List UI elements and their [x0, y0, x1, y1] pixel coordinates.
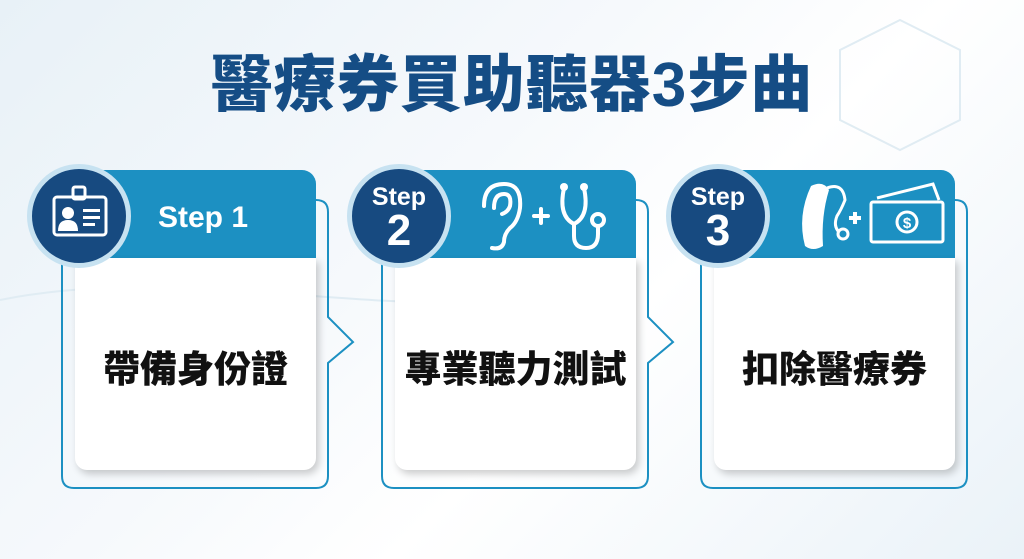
icon: ID card: [27, 164, 131, 268]
panel: step 1: [27, 164, 322, 478]
badge: step 2: Step: [372, 183, 426, 211]
icon: hearing aid plus money: $: [903, 215, 912, 232]
header bar step 1: Step 1: [158, 201, 248, 234]
badge: step 3: [666, 164, 770, 268]
body step 3: 扣除醫療券: [742, 349, 927, 390]
body step 2: 專業聽力測試: [404, 349, 626, 390]
badge: step 3: Step: [691, 183, 745, 211]
panel: step 3: [666, 164, 962, 478]
panel: step 2: [347, 164, 642, 478]
header bar step 3: [711, 170, 955, 258]
body step 3: [714, 258, 955, 470]
header bar step 1: [72, 170, 316, 258]
icon: hearing aid plus money: [802, 182, 944, 249]
body step 1: [75, 258, 316, 470]
header bar step 2: [392, 170, 636, 258]
icon: ear plus stethoscope: [482, 182, 606, 250]
badge: step 3: 3: [706, 206, 730, 255]
body step 1: 帶備身份證: [103, 349, 288, 390]
title: 醫療券買助聽器3步曲: [211, 51, 813, 120]
body step 2: [395, 258, 636, 470]
badge: step 2: 2: [387, 206, 411, 255]
badge: step 2: [347, 164, 451, 268]
